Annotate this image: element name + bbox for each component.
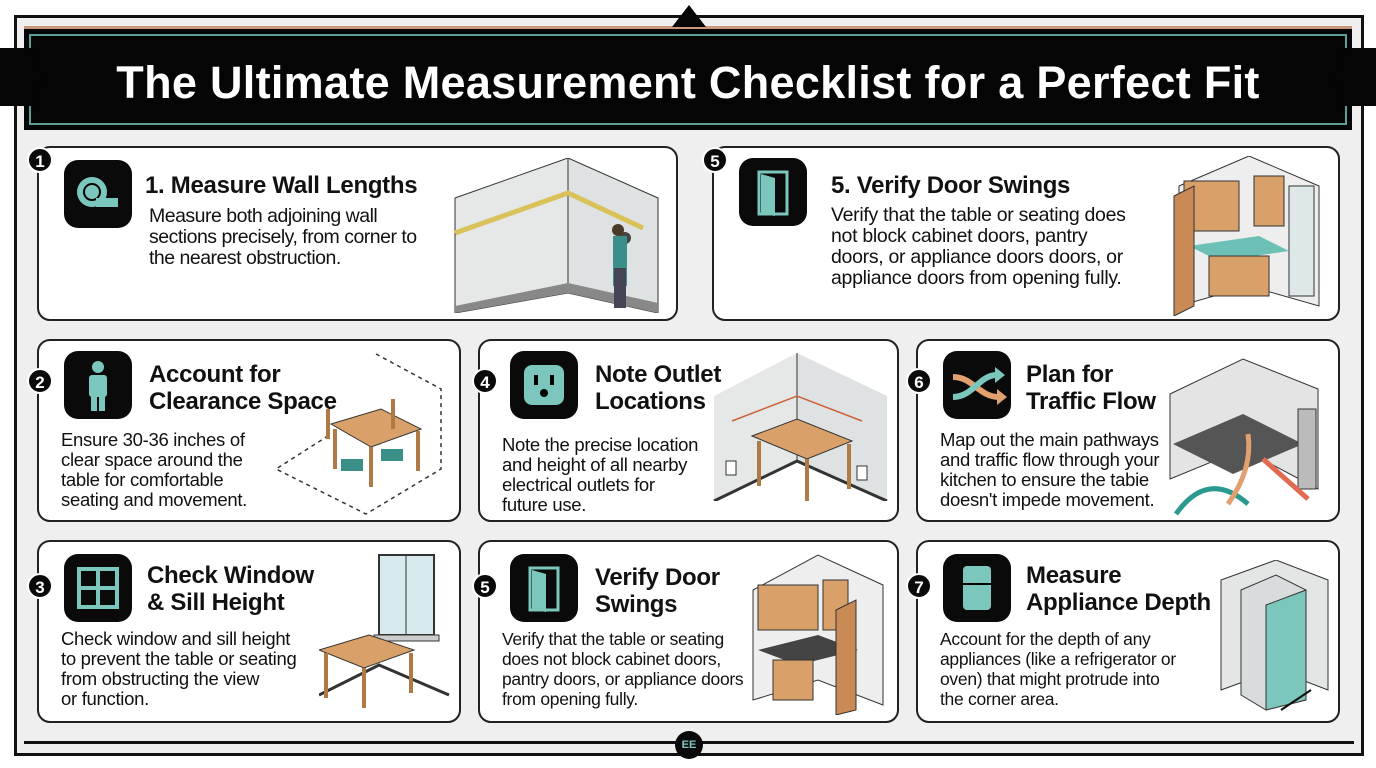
heading: Locations: [595, 388, 706, 415]
text: doors, or appliance doors doors, or: [831, 246, 1123, 268]
heading: Plan for: [1026, 361, 1113, 388]
badge 5b: 5: [480, 578, 490, 597]
badge 7: 7: [914, 578, 924, 597]
text: Verify that the table or seating: [502, 629, 724, 649]
badge 5: 5: [710, 152, 720, 171]
badge 5b: [472, 573, 498, 599]
icon: person: [64, 351, 132, 419]
text: sections precisely, from corner to: [149, 226, 417, 248]
icon: window: [64, 554, 132, 622]
heading: [1026, 562, 1211, 616]
text: not block cabinet doors, pantry: [831, 225, 1087, 247]
text: and height of all nearby: [502, 454, 687, 475]
card 4: outlets: [478, 339, 899, 522]
text: or function.: [61, 688, 149, 709]
illustration: kitchen: [1170, 358, 1318, 516]
text: [502, 629, 743, 709]
text: and traffic flow through your: [940, 449, 1159, 470]
heading: Swings: [595, 591, 677, 618]
badge 2: 2: [35, 373, 45, 392]
badge 6: 6: [914, 373, 924, 392]
text: [831, 204, 1126, 289]
card 5 top: verify door swings: [712, 146, 1340, 321]
icon: shuffle arrows: [943, 351, 1011, 419]
illustration: wall corner: [454, 158, 658, 313]
text: doesn't impede movement.: [940, 489, 1154, 510]
text: electrical outlets for: [502, 474, 655, 495]
icon: outlet: [510, 351, 578, 419]
heading: [595, 361, 722, 415]
badge 5: [702, 147, 728, 173]
text: clear space around the: [61, 449, 243, 470]
badge 6: [906, 368, 932, 394]
badge 7: [906, 573, 932, 599]
bottom logo: [675, 731, 703, 759]
heading: Traffic Flow: [1026, 388, 1156, 415]
text: appliance doors from opening fully.: [831, 267, 1121, 289]
card 6: traffic: [916, 339, 1340, 522]
text: [940, 629, 1176, 709]
illustration: window and table: [319, 554, 450, 708]
left arrow tab: [0, 48, 31, 106]
heading: Measure: [1026, 562, 1121, 589]
icon: fridge: [943, 554, 1011, 622]
text: Verify that the table or seating does: [831, 204, 1126, 226]
badge 4: 4: [480, 373, 490, 392]
text: future use.: [502, 494, 586, 515]
text: Note the precise location: [502, 434, 698, 455]
text: [61, 628, 296, 709]
text: does not block cabinet doors,: [502, 649, 721, 669]
heading: Appliance Depth: [1026, 589, 1211, 616]
text: Ensure 30-36 inches of: [61, 429, 245, 450]
card 3: window: [37, 540, 461, 723]
illustration: table with chairs: [277, 353, 442, 515]
title banner: [24, 26, 1352, 130]
bottom line: [24, 741, 1354, 744]
bottom logo: EE: [682, 739, 696, 751]
text: the corner area.: [940, 689, 1059, 709]
text: kitchen to ensure the tabie: [940, 469, 1149, 490]
text: Measure both adjoining wall: [149, 205, 377, 227]
text: from opening fully.: [502, 689, 638, 709]
heading: Clearance Space: [149, 388, 337, 415]
badge 1: [27, 147, 53, 173]
right arrow tab: [1345, 48, 1376, 106]
card 7: appliance depth: [916, 540, 1340, 723]
text: pantry doors, or appliance doors: [502, 669, 743, 689]
icon: tape measure: [64, 160, 132, 228]
text: [149, 205, 417, 269]
heading: [595, 564, 720, 618]
badge 3: [27, 573, 53, 599]
icon: door: [739, 158, 807, 226]
heading: [147, 562, 314, 616]
badge 4: [472, 368, 498, 394]
illustration: cabinets: [1174, 156, 1320, 316]
text: oven) that might protrude into: [940, 669, 1160, 689]
text: [940, 429, 1160, 510]
badge 3: 3: [35, 578, 45, 597]
card 2: clearance: [37, 339, 461, 522]
heading: Note Outlet: [595, 361, 721, 388]
text: [61, 429, 247, 510]
heading: Check Window: [147, 562, 314, 589]
icon: door: [510, 554, 578, 622]
text: [502, 434, 698, 515]
text: Check window and sill height: [61, 628, 290, 649]
heading: [149, 361, 337, 415]
card 1: measure wall lengths: [37, 146, 678, 321]
heading: Verify Door: [595, 564, 720, 591]
text: from obstructing the view: [61, 668, 259, 689]
text: Map out the main pathways: [940, 429, 1159, 450]
text: to prevent the table or seating: [61, 648, 296, 669]
top ornament: [672, 5, 706, 27]
title: The Ultimate Measurement Checklist for a Perfect Fit: [116, 57, 1260, 108]
heading: [1026, 361, 1156, 415]
text: appliances (like a refrigerator or: [940, 649, 1176, 669]
illustration: cabinets: [752, 554, 884, 715]
text: the nearest obstruction.: [149, 247, 341, 269]
text: seating and movement.: [61, 489, 247, 510]
illustration: corner with table: [713, 353, 888, 501]
heading: & Sill Height: [147, 589, 284, 616]
badge 2: [27, 368, 53, 394]
heading: 1. Measure Wall Lengths: [145, 172, 417, 199]
text: Account for the depth of any: [940, 629, 1150, 649]
heading: 5. Verify Door Swings: [831, 172, 1070, 199]
heading: Account for: [149, 361, 280, 388]
illustration: fridge: [1220, 560, 1328, 711]
card 5 bottom: verify door swings: [478, 540, 899, 723]
badge 1: 1: [35, 152, 45, 171]
text: table for comfortable: [61, 469, 223, 490]
